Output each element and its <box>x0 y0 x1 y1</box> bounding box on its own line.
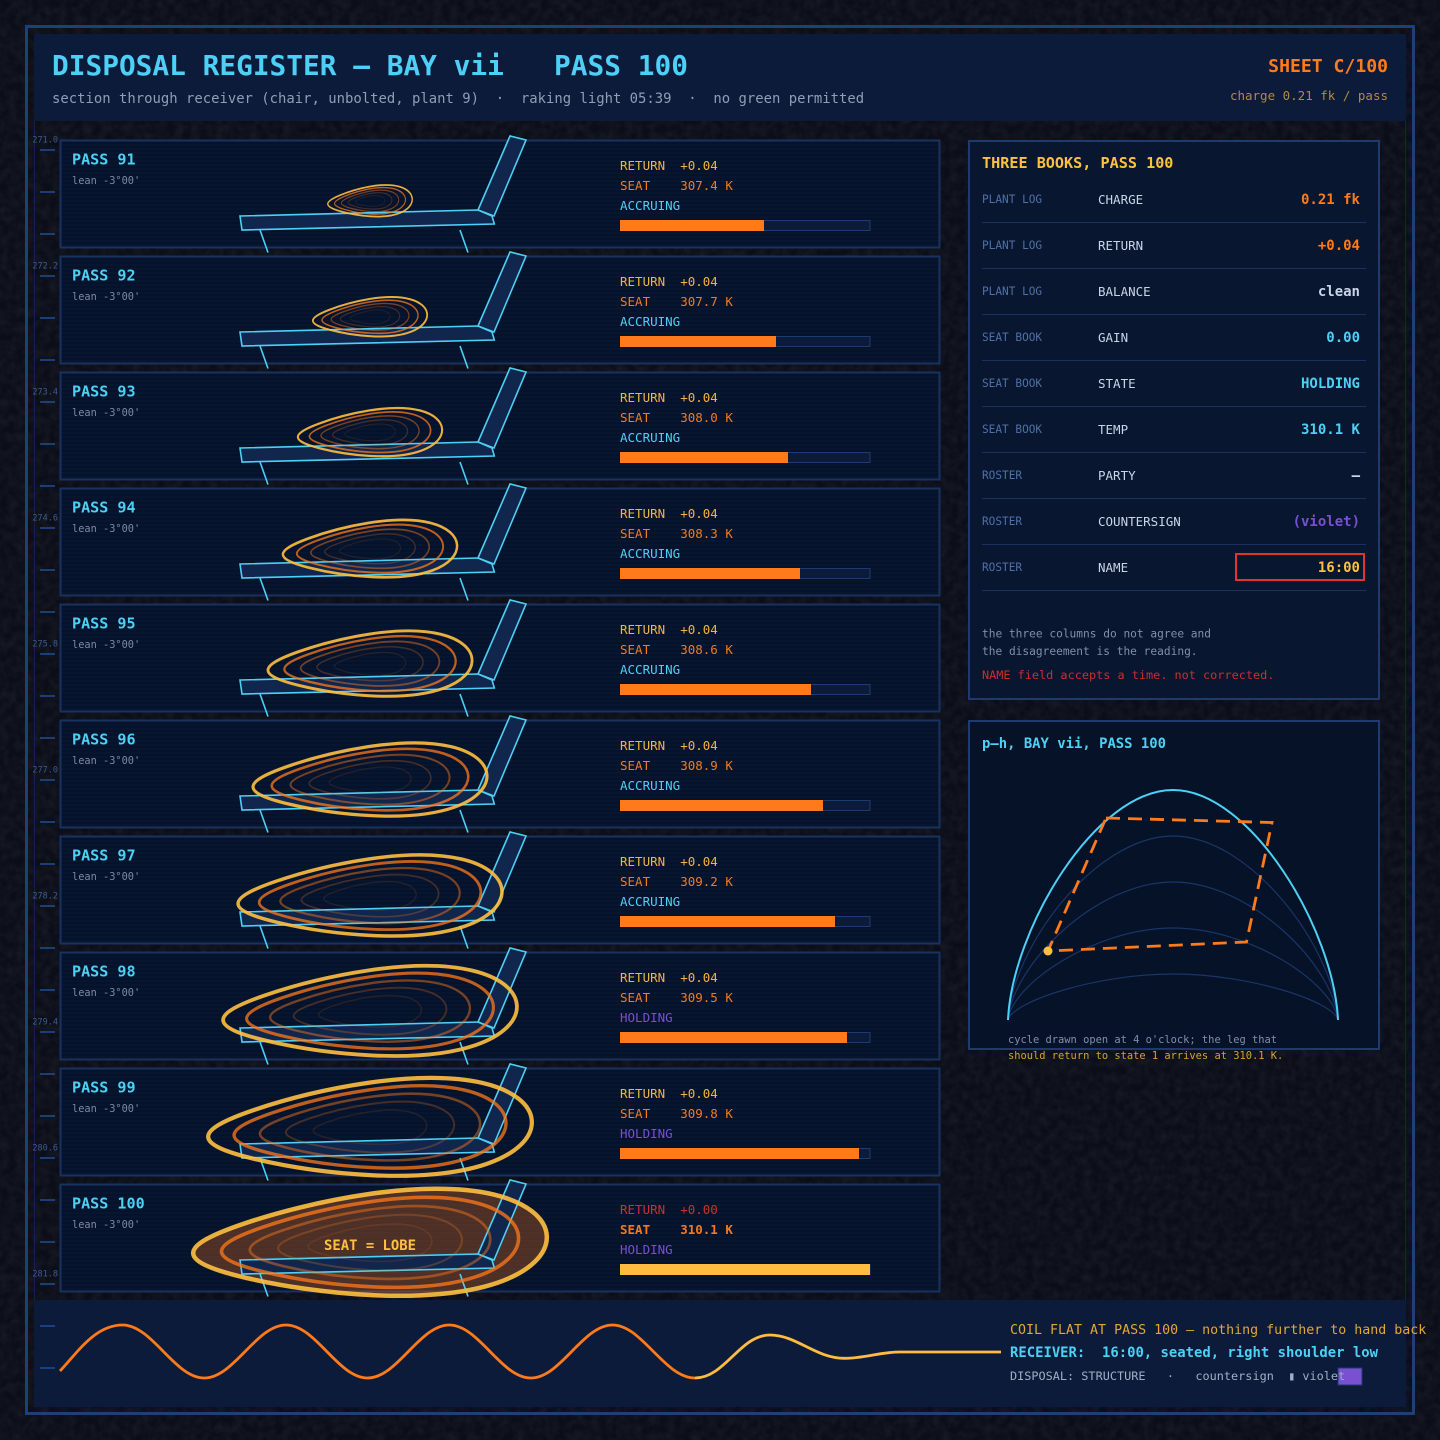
ledger row: countersign <box>982 514 1360 530</box>
ledger row: gain: GAIN <box>1098 330 1128 345</box>
chair section <box>240 484 526 600</box>
seat reading: SEAT 309.2 K <box>620 874 733 889</box>
ledger row: return: RETURN <box>1098 238 1143 253</box>
ledger row: return: PLANT LOG <box>982 239 1042 252</box>
saturation dome <box>1008 790 1338 1020</box>
temperature scale labels: 281.8 <box>32 1270 58 1280</box>
ledger row: state <box>982 376 1360 392</box>
return reading: RETURN +0.04 <box>620 390 718 405</box>
panel: pass 97 <box>60 832 940 948</box>
pass 96 label: PASS 96 <box>72 730 136 748</box>
seat reading: SEAT 307.7 K <box>620 294 733 309</box>
state: ACCRUING <box>620 314 680 329</box>
pass 97 label: PASS 97 <box>72 846 136 864</box>
footer band <box>34 1300 1406 1407</box>
temperature scale labels: 275.8 <box>32 640 58 650</box>
chair section <box>240 832 526 948</box>
temperature scale labels: 274.6 <box>32 514 58 524</box>
ledger row: charge <box>982 192 1361 208</box>
seat reading: SEAT 308.0 K <box>620 410 733 425</box>
filled lobe <box>191 1183 549 1306</box>
ledger row: return: +0.04 <box>1318 238 1360 254</box>
ledger row: state: SEAT BOOK <box>982 377 1042 390</box>
lean reading: lean -3°00' <box>72 175 140 187</box>
progress bar <box>620 1032 870 1043</box>
temperature scale labels: 280.6 <box>32 1144 58 1154</box>
seat lobe contours <box>221 961 519 1065</box>
ledger row: charge: 0.21 fk <box>1301 192 1361 208</box>
return reading: RETURN +0.04 <box>620 506 718 521</box>
temperature scale labels: 273.4 <box>32 388 58 398</box>
seat reading: SEAT 308.3 K <box>620 526 733 541</box>
note text: the three columns do not agree and <box>982 628 1211 640</box>
state: ACCRUING <box>620 198 680 213</box>
ledger row dividers <box>982 222 1366 590</box>
seat equals lobe label: SEAT = LOBE <box>324 1238 416 1254</box>
lean reading: lean -3°00' <box>72 407 140 419</box>
lean reading: lean -3°00' <box>72 639 140 651</box>
pass 100 label: PASS 100 <box>72 1194 145 1212</box>
title: DISPOSAL REGISTER — BAY vii PASS 100 <box>52 49 688 82</box>
chair section <box>240 252 526 368</box>
temperature scale labels: 279.4 <box>32 1018 58 1028</box>
temperature scale labels: 271.0 <box>32 136 58 146</box>
progress bar <box>620 1264 870 1275</box>
lean reading: lean -3°00' <box>72 1219 140 1231</box>
coil trace <box>60 1325 1001 1378</box>
diagram heading: p—h, BAY vii, PASS 100 <box>982 736 1166 752</box>
seat reading: SEAT 309.8 K <box>620 1106 733 1121</box>
footer text: DISPOSAL: STRUCTURE · countersign ▮ violet <box>1010 1369 1345 1383</box>
ledger row: gain: SEAT BOOK <box>982 331 1042 344</box>
lean reading: lean -3°00' <box>72 1103 140 1115</box>
ledger row: balance <box>982 284 1360 300</box>
panel: pass 94 <box>60 484 940 600</box>
panel: p-h diagram <box>969 721 1379 1062</box>
header band <box>34 34 1406 121</box>
return reading: RETURN +0.04 <box>620 274 718 289</box>
ledger row: temp: 310.1 K <box>1301 422 1361 438</box>
chair section <box>240 716 526 832</box>
return reading: RETURN +0.04 <box>620 738 718 753</box>
ledger row: balance: clean <box>1318 284 1360 300</box>
ledger row: return <box>982 238 1360 254</box>
seat lobe contours <box>206 1073 534 1185</box>
violet swatch <box>1338 1368 1362 1385</box>
state: HOLDING <box>620 1126 673 1141</box>
lean reading: lean -3°00' <box>72 291 140 303</box>
subtitle: section through receiver (chair, unbolted, plant 9) · raking light 05:39 · no green permitted <box>52 91 864 107</box>
temperature scale labels: 278.2 <box>32 892 58 902</box>
chair section <box>240 136 526 252</box>
progress bar <box>620 1148 870 1159</box>
state: HOLDING <box>620 1010 673 1025</box>
return reading: RETURN +0.04 <box>620 854 718 869</box>
ledger row: name: NAME <box>1098 560 1128 575</box>
diagram caption <box>1008 1034 1283 1062</box>
return reading: RETURN +0.04 <box>620 970 718 985</box>
progress bar <box>620 916 870 927</box>
seat reading: SEAT 308.6 K <box>620 642 733 657</box>
seat lobe contours <box>266 627 474 703</box>
note text: the disagreement is the reading. <box>982 645 1198 658</box>
ledger row: state: HOLDING <box>1301 376 1360 392</box>
ledger row: temp <box>982 422 1361 438</box>
seat lobe contours <box>327 183 413 220</box>
ledger row: party: ROSTER <box>982 469 1022 482</box>
panel: pass 91 <box>60 136 940 252</box>
ledger row: gain: 0.00 <box>1326 330 1360 346</box>
pass 93 label: PASS 93 <box>72 382 136 400</box>
seat lobe contours <box>297 405 443 461</box>
progress bar <box>620 568 870 579</box>
lean reading: lean -3°00' <box>72 755 140 767</box>
panel: pass 96 <box>60 716 940 832</box>
temperature scale ticks <box>40 150 55 1368</box>
return reading: RETURN +0.04 <box>620 622 718 637</box>
state: ACCRUING <box>620 778 680 793</box>
ledger row: state: STATE <box>1098 376 1136 391</box>
state: ACCRUING <box>620 894 680 909</box>
ledger row: temp: TEMP <box>1098 422 1128 437</box>
panel heading: THREE BOOKS, PASS 100 <box>982 154 1173 172</box>
chair section <box>240 1064 526 1180</box>
panel: three books <box>969 141 1379 699</box>
progress bar <box>620 800 870 811</box>
pass 98 label: PASS 98 <box>72 962 136 980</box>
panel: pass 93 <box>60 368 940 484</box>
temperature scale labels <box>32 136 58 1280</box>
ledger row: balance: BALANCE <box>1098 284 1151 299</box>
lean reading: lean -3°00' <box>72 987 140 999</box>
pass 94 label: PASS 94 <box>72 498 136 516</box>
state marker <box>1044 946 1052 956</box>
progress bar <box>620 220 870 231</box>
panel: pass 98 <box>60 948 940 1065</box>
diagram caption: cycle drawn open at 4 o'clock; the leg that <box>1008 1034 1277 1046</box>
seat lobe contours <box>236 851 504 944</box>
pass 99 label: PASS 99 <box>72 1078 136 1096</box>
return reading: RETURN +0.00 <box>620 1202 718 1217</box>
footer text: COIL FLAT AT PASS 100 — nothing further to hand back <box>1010 1323 1426 1338</box>
ledger row: countersign: COUNTERSIGN <box>1098 514 1181 529</box>
pass 91 label: PASS 91 <box>72 150 136 168</box>
panel: pass 95 <box>60 600 940 716</box>
progress bar <box>620 684 870 695</box>
note text <box>982 628 1211 658</box>
pass 92 label: PASS 92 <box>72 266 136 284</box>
seat lobe contours <box>312 295 428 340</box>
ledger row: countersign: (violet) <box>1293 514 1360 530</box>
open cycle <box>1048 818 1272 951</box>
state: HOLDING <box>620 1242 673 1257</box>
seat lobe contours <box>251 739 489 823</box>
footer text: RECEIVER: 16:00, seated, right shoulder low <box>1010 1345 1379 1361</box>
chair section <box>240 948 526 1064</box>
seat lobe contours <box>282 517 458 583</box>
footer text <box>1010 1323 1426 1385</box>
ledger row: name: ROSTER <box>982 561 1022 574</box>
seat lobe contours <box>191 1183 549 1306</box>
chair section <box>240 1180 526 1296</box>
charge note: charge 0.21 fk / pass <box>1230 88 1388 103</box>
inner isolines <box>1008 836 1338 1020</box>
ledger row: gain <box>982 330 1360 346</box>
chair section <box>240 368 526 484</box>
ledger row: name: 16:00 <box>1318 560 1360 576</box>
ledger row: party <box>982 468 1361 484</box>
seat reading: SEAT 307.4 K <box>620 178 733 193</box>
return reading: RETURN +0.04 <box>620 1086 718 1101</box>
ledger row: charge: PLANT LOG <box>982 193 1042 206</box>
diagram caption: should return to state 1 arrives at 310.1 K. <box>1008 1050 1283 1062</box>
ledger row: temp: SEAT BOOK <box>982 423 1042 436</box>
progress bar <box>620 452 870 463</box>
ledger row: countersign: ROSTER <box>982 515 1022 528</box>
panel: pass 100 <box>60 1180 940 1306</box>
state: ACCRUING <box>620 546 680 561</box>
chair section <box>240 600 526 716</box>
panel: pass 99 <box>60 1064 940 1185</box>
pass 95 label: PASS 95 <box>72 614 136 632</box>
seat reading: SEAT 309.5 K <box>620 990 733 1005</box>
ledger row: party: PARTY <box>1098 468 1136 483</box>
ledger row: balance: PLANT LOG <box>982 285 1042 298</box>
temperature scale labels: 272.2 <box>32 262 58 272</box>
ledger row: charge: CHARGE <box>1098 192 1143 207</box>
ledger row: party: — <box>1352 468 1361 484</box>
panel: pass 92 <box>60 252 940 368</box>
lean reading: lean -3°00' <box>72 871 140 883</box>
seat reading: SEAT 308.9 K <box>620 758 733 773</box>
temperature scale labels: 277.0 <box>32 766 58 776</box>
sheet number: SHEET C/100 <box>1268 56 1388 77</box>
return reading: RETURN +0.04 <box>620 158 718 173</box>
state: ACCRUING <box>620 662 680 677</box>
ledger row: name <box>982 554 1364 580</box>
red correction note: NAME field accepts a time. not corrected. <box>982 668 1274 682</box>
state: ACCRUING <box>620 430 680 445</box>
lean reading: lean -3°00' <box>72 523 140 535</box>
seat reading: SEAT 310.1 K <box>620 1222 733 1237</box>
progress bar <box>620 336 870 347</box>
